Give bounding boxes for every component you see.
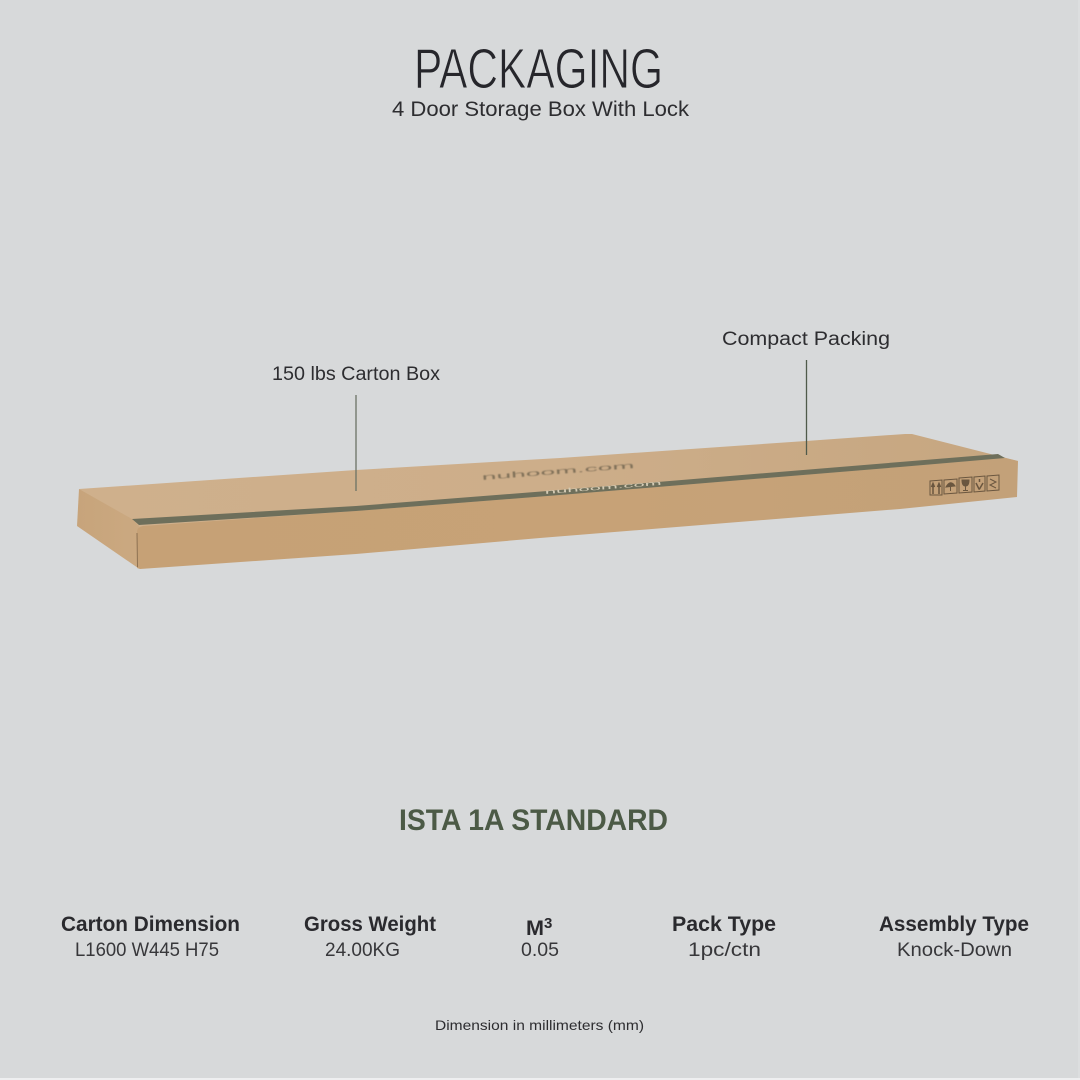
icon: fragile <box>959 477 972 493</box>
icon: no hooks <box>987 475 999 491</box>
strip logo: nuhoom.com <box>545 481 662 496</box>
spec: pack type: 1pc/ctn <box>688 940 761 961</box>
front corner shadow <box>136 533 138 567</box>
box top face <box>79 434 1018 530</box>
spec: gross weight <box>304 913 436 961</box>
spec: pack type <box>672 913 776 961</box>
icon: keep dry <box>944 479 957 494</box>
box front face <box>137 458 1018 569</box>
spec: assembly type <box>879 913 1029 961</box>
icon: this way up <box>930 480 942 495</box>
callout: compact packing: Compact Packing <box>722 329 890 350</box>
spec: carton dimension <box>61 913 240 961</box>
spec: pack type: Pack Type <box>672 913 776 936</box>
carton box illustration <box>77 434 1018 569</box>
spec: gross weight: Gross Weight <box>304 913 436 936</box>
spec: assembly type: Knock-Down <box>897 940 1012 961</box>
green packing strip <box>132 454 1005 525</box>
spec: cubic metres: 3 <box>544 915 552 932</box>
handling icons <box>930 475 999 495</box>
subtitle: 4 Door Storage Box With Lock <box>392 98 690 121</box>
footnote: Dimension in millimeters (mm) <box>435 1017 644 1033</box>
top face logo: nuhoom.com <box>481 460 635 482</box>
spec: assembly type: Assembly Type <box>879 913 1029 936</box>
spec: carton dimension: L1600 W445 H75 <box>75 940 219 961</box>
spec: gross weight: 24.00KG <box>325 940 400 961</box>
spec: cubic metres: M <box>526 917 544 940</box>
spec: cubic metres <box>521 915 559 961</box>
title: PACKAGING <box>414 37 663 101</box>
spec: carton dimension: Carton Dimension <box>61 913 240 936</box>
spec: cubic metres: 0.05 <box>521 940 559 961</box>
callout: 150 lbs carton box: 150 lbs Carton Box <box>272 364 441 385</box>
box left end face <box>77 489 140 568</box>
standard heading: ISTA 1A STANDARD <box>399 804 668 837</box>
icon: handle with care <box>974 476 985 492</box>
